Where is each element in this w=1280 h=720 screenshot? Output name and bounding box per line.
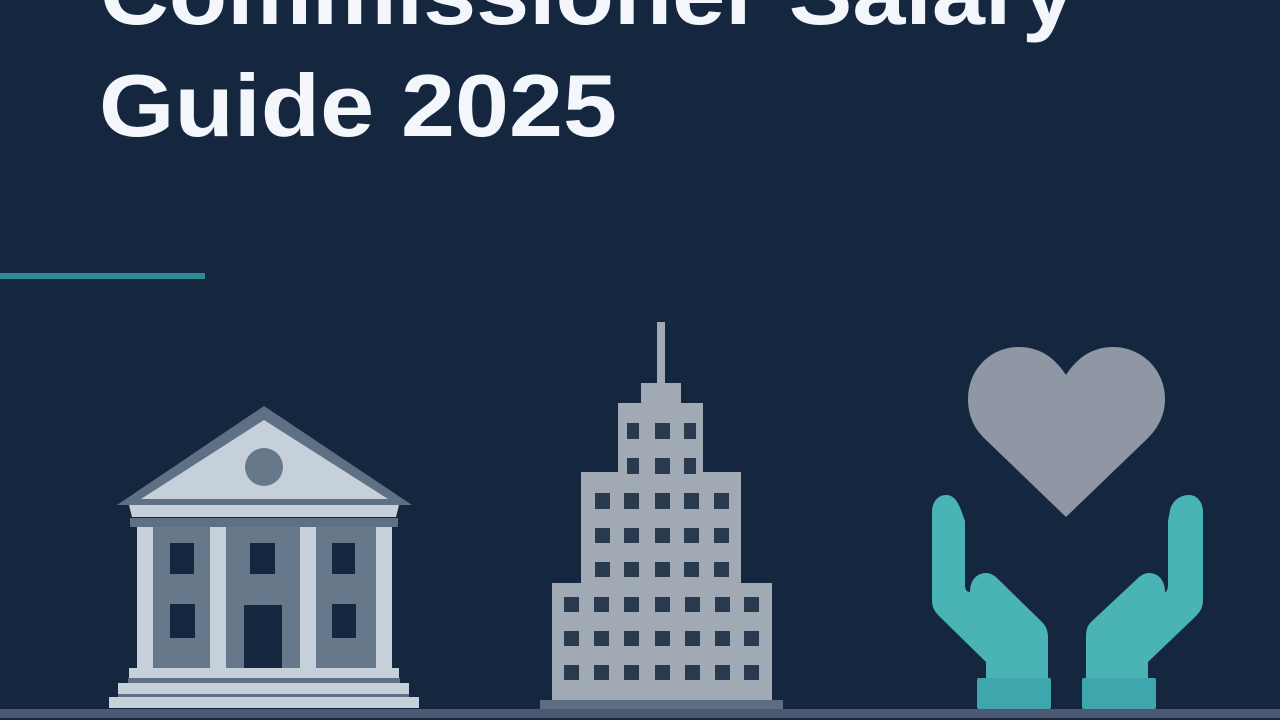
icon: government building [109, 406, 419, 708]
title: Guide 2025 [99, 56, 617, 155]
icon: right cuff [1082, 678, 1156, 709]
title [99, 0, 1075, 155]
ground line [0, 709, 1280, 718]
icon: left hand [932, 495, 1048, 678]
icon: skyscraper [540, 322, 783, 709]
icon: heart held by hands [932, 347, 1203, 709]
accent line [0, 273, 205, 279]
icon: right hand [1086, 495, 1203, 678]
icon: heart [968, 347, 1165, 517]
icon: left cuff [977, 678, 1051, 709]
